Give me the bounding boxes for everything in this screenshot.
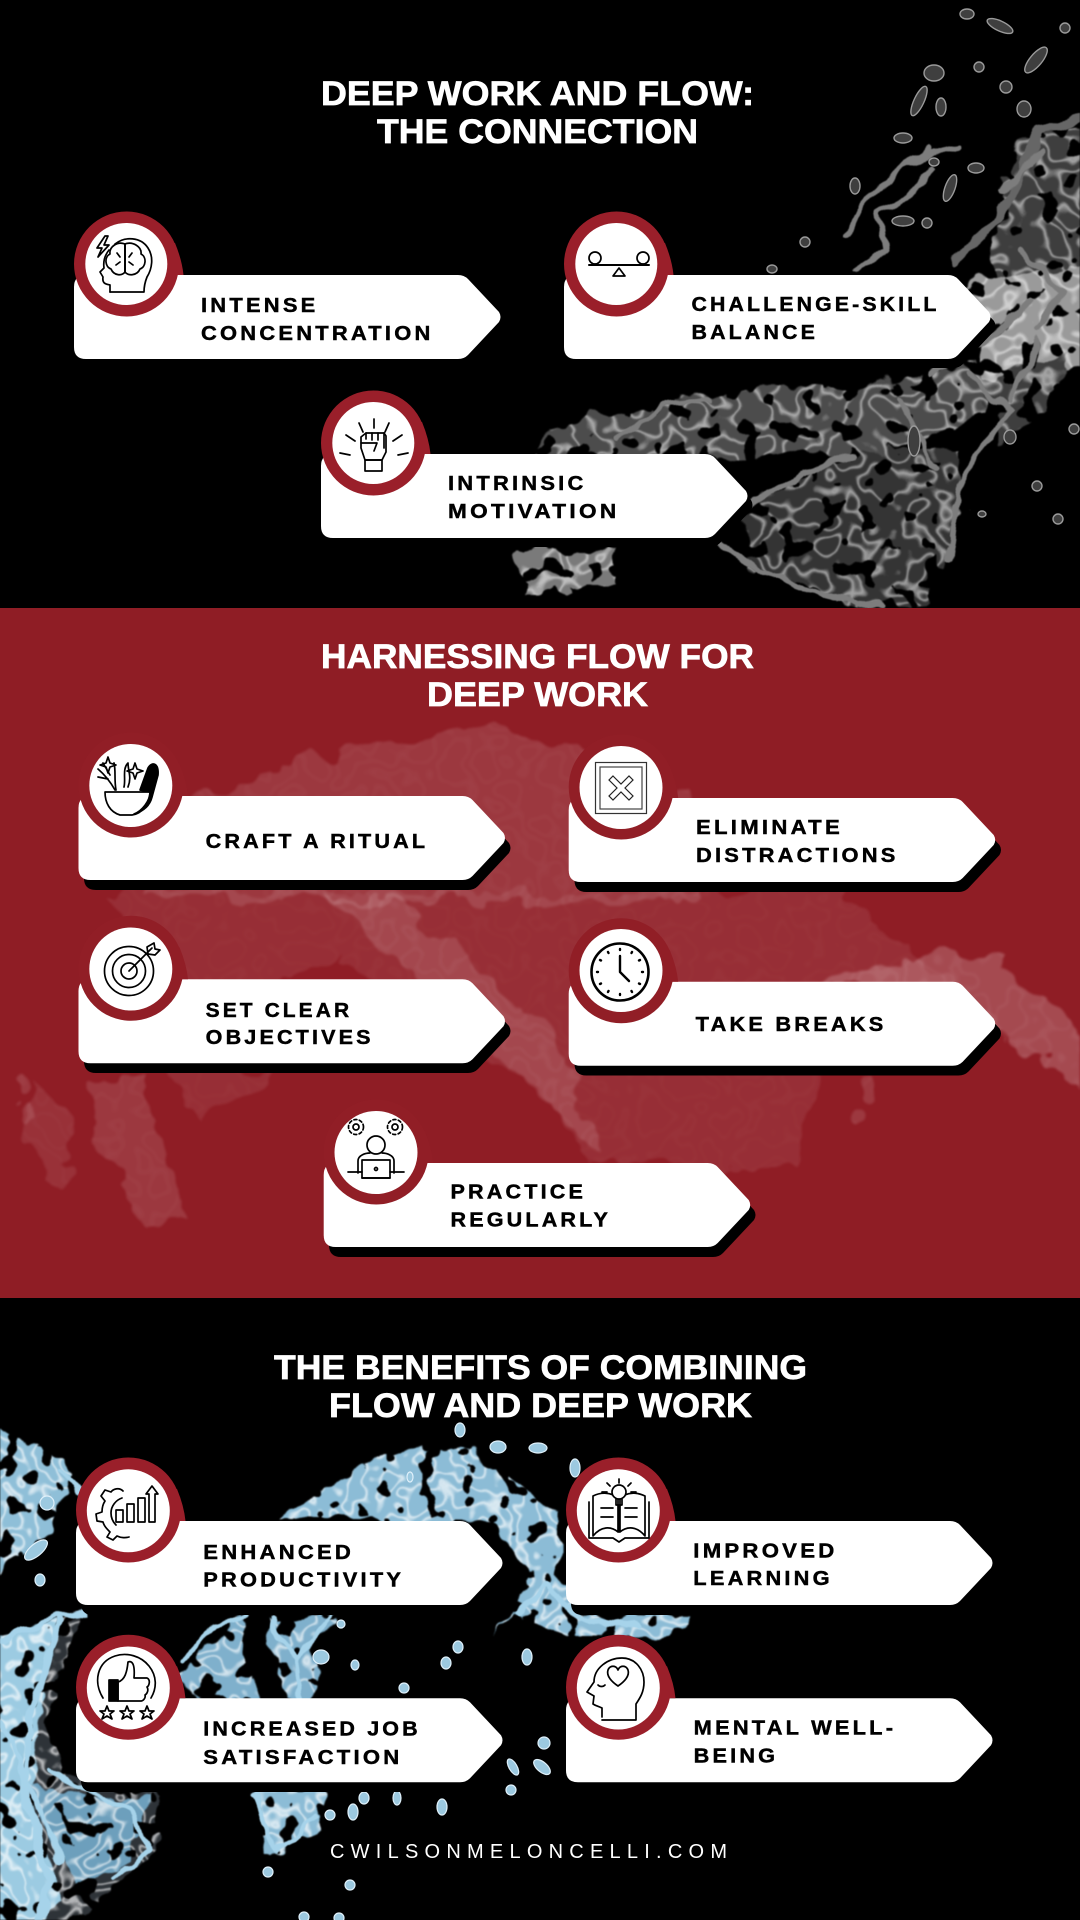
- droplets: [21, 1423, 580, 1920]
- icon: clock: [592, 944, 648, 1000]
- title: benefits: [274, 1349, 807, 1425]
- label: CONCENTRATION: [201, 322, 434, 345]
- label: BEING: [694, 1745, 778, 1768]
- icon: balance scale: [589, 252, 649, 276]
- label: [450, 1180, 611, 1232]
- label: [696, 816, 898, 867]
- card: craft a ritual: [78, 732, 510, 890]
- label: CRAFT A RITUAL: [206, 830, 428, 853]
- label: TAKE BREAKS: [696, 1013, 886, 1036]
- label: PRODUCTIVITY: [203, 1569, 404, 1592]
- card: intense concentration: [74, 212, 500, 359]
- label: [203, 1541, 404, 1592]
- section background: black top: [0, 0, 1080, 608]
- label: [448, 472, 620, 523]
- card: challenge-skill balance: [564, 212, 996, 368]
- icon: thumbs up with stars: [98, 1654, 155, 1719]
- icon: crossed box: [596, 762, 646, 814]
- label: [201, 294, 434, 345]
- label: [203, 1718, 421, 1769]
- title: harnessing flow: DEEP WORK: [427, 676, 648, 714]
- title: harnessing flow: [321, 638, 754, 714]
- footer: website: CWILSONMELONCELLI.COM: [330, 1841, 727, 1863]
- title: harnessing flow: HARNESSING FLOW FOR: [321, 638, 754, 676]
- icon: mortar and pestle: [98, 757, 158, 815]
- icon: person with laptop and gears: [348, 1120, 404, 1178]
- label: MOTIVATION: [448, 500, 620, 523]
- label: [694, 1716, 896, 1768]
- card: take breaks: [569, 918, 1001, 1076]
- icon: brain in head: [97, 236, 152, 292]
- water splash: translucent white: [7, 728, 1080, 1225]
- water splash: blue lower left: [0, 1420, 687, 1920]
- label: IMPROVED: [693, 1539, 838, 1562]
- droplets: [767, 9, 1079, 524]
- water strands: [620, 120, 1080, 605]
- label: CHALLENGE-SKILL: [692, 293, 940, 316]
- icon: target with arrow: [104, 943, 160, 996]
- label: ELIMINATE: [696, 816, 843, 839]
- title: deep work and flow: [321, 75, 754, 151]
- card: enhanced productivity: [76, 1458, 508, 1615]
- water splash: grey top right: [520, 9, 1080, 612]
- label: PRACTICE: [450, 1180, 586, 1204]
- water strands: [0, 1470, 640, 1920]
- card: mental well-being: [566, 1635, 998, 1792]
- section background: black bottom: [0, 1298, 1080, 1920]
- label: [693, 1539, 838, 1590]
- card: increased job satisfaction: [76, 1635, 508, 1792]
- card: practice regularly: [324, 1100, 756, 1257]
- icon: head with heart: [587, 1658, 644, 1720]
- label: INTRINSIC: [448, 472, 586, 495]
- title: benefits: THE BENEFITS OF COMBINING: [274, 1349, 807, 1387]
- card: set clear objectives: [78, 916, 510, 1073]
- icon: raised fist: [340, 419, 408, 471]
- label: SET CLEAR: [206, 999, 352, 1022]
- label: INCREASED JOB: [203, 1718, 421, 1741]
- label: [206, 999, 374, 1049]
- label: LEARNING: [693, 1567, 833, 1590]
- label: BALANCE: [692, 321, 818, 344]
- label: MENTAL WELL-: [694, 1716, 896, 1739]
- title: benefits: FLOW AND DEEP WORK: [329, 1387, 752, 1425]
- title: deep work and flow: DEEP WORK AND FLOW:: [321, 75, 754, 113]
- card: eliminate distractions: [569, 734, 1001, 892]
- card: intrinsic motivation: [321, 390, 752, 547]
- label: ENHANCED: [203, 1541, 354, 1564]
- label: OBJECTIVES: [206, 1026, 374, 1049]
- title: deep work and flow: THE CONNECTION: [377, 113, 698, 151]
- label: [692, 293, 940, 344]
- label: DISTRACTIONS: [696, 844, 898, 867]
- icon: open book with bulb: [589, 1479, 649, 1542]
- panel: harnessing flow: [0, 608, 1080, 1298]
- card: improved learning: [566, 1458, 998, 1615]
- label: REGULARLY: [450, 1208, 611, 1232]
- label: SATISFACTION: [203, 1746, 402, 1769]
- icon: gear and rising chart: [96, 1486, 158, 1540]
- label: INTENSE: [201, 294, 318, 317]
